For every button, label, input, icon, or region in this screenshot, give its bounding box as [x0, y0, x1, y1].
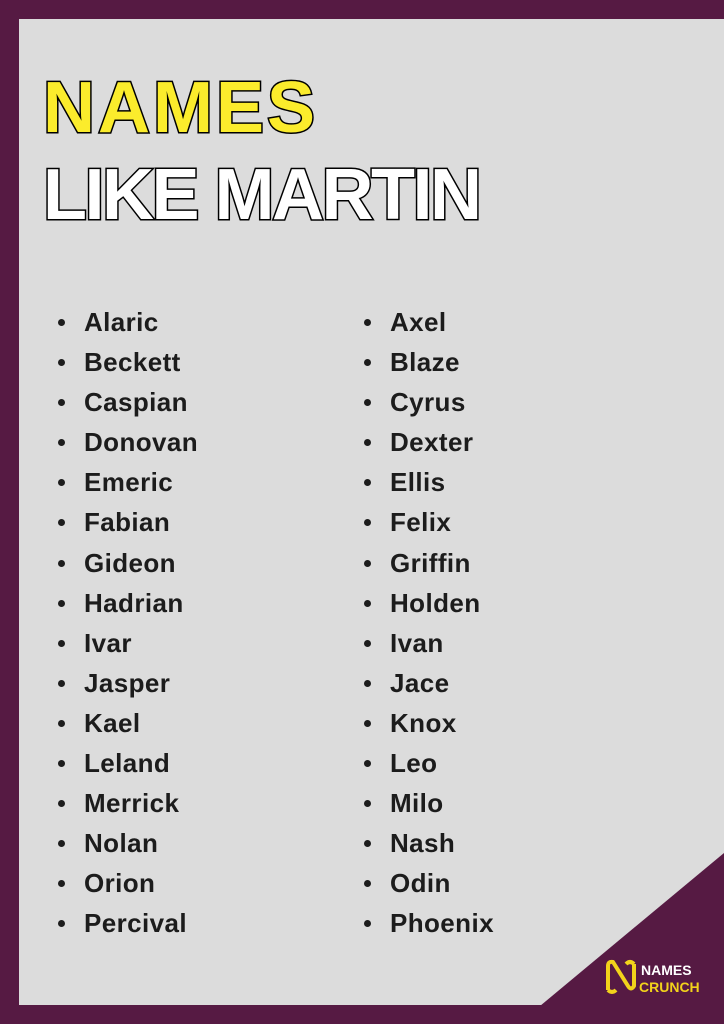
list: right column: Phoenix [390, 908, 494, 938]
list: right column: Ivan [390, 628, 444, 658]
list: right column: Jace [390, 668, 449, 698]
list: right column: Ellis [390, 467, 445, 497]
logo: names crunch: NAMES [641, 962, 692, 978]
list: left column: Beckett [84, 347, 181, 377]
list: right column: Cyrus [390, 387, 466, 417]
list: left column: Hadrian [84, 588, 184, 618]
list: right column: Holden [390, 588, 481, 618]
list: left column: Leland [84, 748, 170, 778]
list: right column: Felix [390, 507, 451, 537]
list: right column: Nash [390, 828, 455, 858]
logo: names crunch: CRUNCH [639, 979, 700, 995]
list: left column: Percival [84, 908, 187, 938]
logo: names crunch [606, 960, 700, 995]
list: right column: Blaze [390, 347, 460, 377]
list: left column: Donovan [84, 427, 198, 457]
list: right column: Dexter [390, 427, 473, 457]
list: left column: Kael [84, 708, 141, 738]
list: left column: Jasper [84, 668, 170, 698]
list: right column: Odin [390, 868, 451, 898]
list: left column: Gideon [84, 548, 176, 578]
list: left column: Caspian [84, 387, 188, 417]
list: left column: Emeric [84, 467, 173, 497]
list: right column: Griffin [390, 548, 471, 578]
title: NAMES: NAMES [43, 68, 318, 148]
list: left column: Ivar [84, 628, 132, 658]
list: right column: Axel [390, 307, 447, 337]
list: left column: Merrick [84, 788, 179, 818]
list: right column: Leo [390, 748, 437, 778]
title: LIKE MARTIN: LIKE MARTIN [43, 155, 479, 235]
list: left column: Fabian [84, 507, 170, 537]
list: left column [58, 307, 198, 938]
list: right column: Milo [390, 788, 444, 818]
list: right column: Knox [390, 708, 457, 738]
list: left column: Orion [84, 868, 155, 898]
list: left column: Alaric [84, 307, 159, 337]
list: right column [364, 307, 494, 938]
list: left column: Nolan [84, 828, 158, 858]
